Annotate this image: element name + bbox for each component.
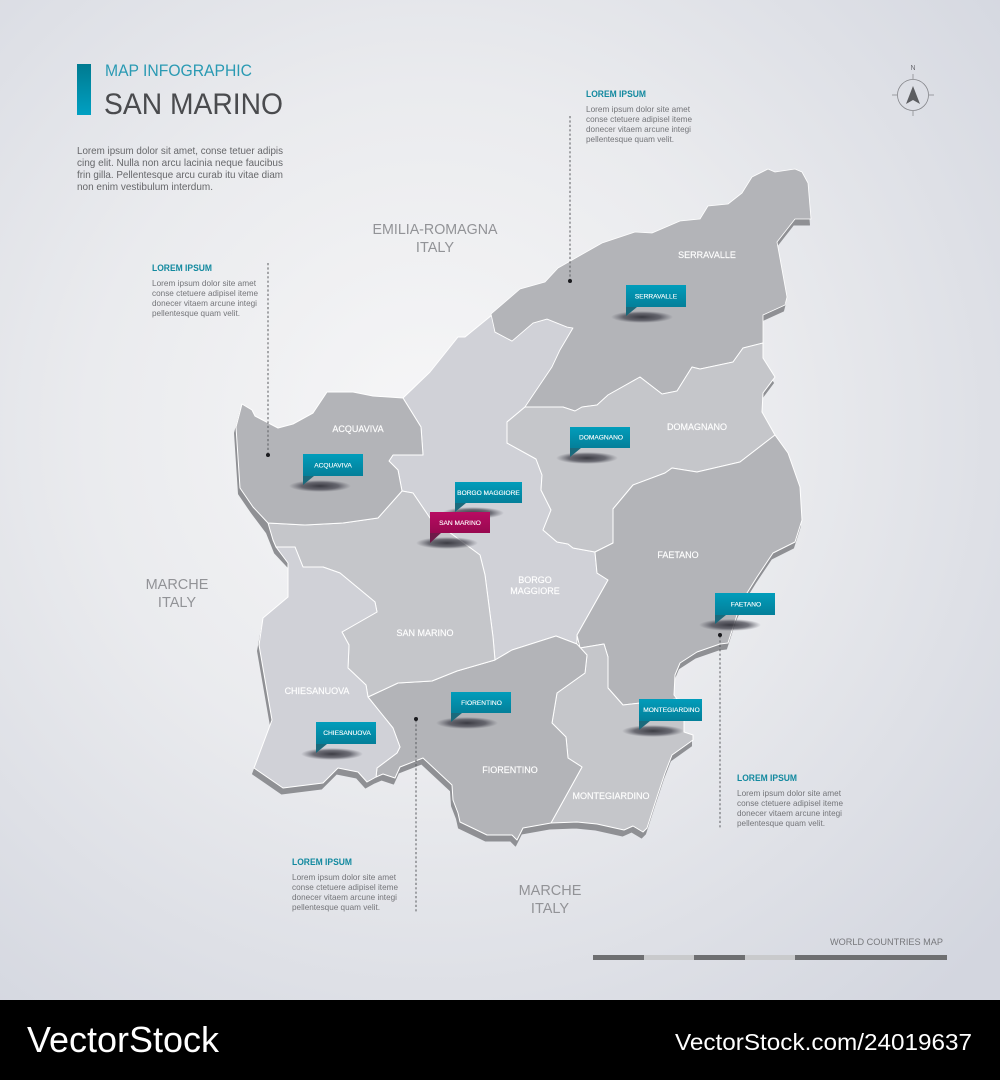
leader line: top	[568, 116, 572, 283]
flag: San Marino (capital)	[416, 512, 490, 549]
flag: Fiorentino	[436, 692, 511, 729]
intro text: Lorem ipsum dolor sit amet, conse tetuer adipis	[77, 146, 283, 157]
icon: compass: N	[910, 65, 916, 72]
flag: Acquaviva: ACQUAVIVA	[314, 462, 352, 470]
callout: top	[586, 89, 692, 144]
neighbouring region labels: MARCHE	[519, 883, 582, 899]
callout: top: LOREM IPSUM	[586, 89, 646, 99]
icon: compass	[892, 65, 934, 116]
callout: right: conse ctetuere adipisel iteme	[737, 798, 843, 808]
callout: right: pellentesque quam velit.	[737, 818, 825, 828]
callout: top: pellentesque quam velit.	[586, 134, 674, 144]
region names: MONTEGIARDINO	[572, 791, 650, 801]
callout: left	[152, 263, 258, 318]
callout: left: conse ctetuere adipisel iteme	[152, 288, 258, 298]
flag: Chiesanuova	[301, 722, 376, 760]
callout: left: Lorem ipsum dolor site amet	[152, 278, 257, 288]
flag: Faetano: FAETANO	[731, 602, 761, 608]
region names: SERRAVALLE	[678, 250, 736, 260]
neighbouring region labels: MARCHE	[146, 577, 209, 593]
callout: bottom	[292, 857, 398, 912]
region names: FIORENTINO	[482, 765, 538, 775]
neighbouring region labels: EMILIA-ROMAGNA	[372, 222, 498, 238]
intro text	[77, 146, 283, 193]
subtitle: MAP INFOGRAPHIC	[105, 62, 252, 80]
callout: bottom: pellentesque quam velit.	[292, 902, 380, 912]
callout: top: donecer vitaem arcune integi	[586, 124, 691, 134]
callout: bottom: Lorem ipsum dolor site amet	[292, 872, 397, 882]
intro text: non enim vestibulum interdum.	[77, 182, 213, 193]
region: Domagnano	[507, 343, 775, 552]
intro text: cing elit. Nulla non arcu lacinia neque faucibus	[77, 158, 283, 169]
map 3D edge	[234, 175, 810, 846]
neighbouring region labels	[146, 222, 582, 917]
flag: Borgo Maggiore: BORGO MAGGIORE	[457, 490, 520, 497]
title: SAN MARINO	[104, 88, 283, 121]
region names: SAN MARINO	[396, 628, 454, 638]
map	[234, 169, 811, 846]
callout: right: Lorem ipsum dolor site amet	[737, 788, 842, 798]
callout: bottom: conse ctetuere adipisel iteme	[292, 882, 398, 892]
flag: Montegiardino	[622, 699, 702, 737]
flag: Montegiardino: MONTEGIARDINO	[643, 707, 700, 714]
callout: right: donecer vitaem arcune integi	[737, 808, 842, 818]
flag: Acquaviva	[289, 454, 363, 492]
region names: DOMAGNANO	[667, 422, 727, 432]
scale bar	[593, 955, 947, 960]
callout: bottom: donecer vitaem arcune integi	[292, 892, 397, 902]
flag: Serravalle	[611, 285, 686, 323]
callout: left: LOREM IPSUM	[152, 263, 212, 273]
flag: San Marino (capital): SAN MARINO	[439, 520, 481, 527]
footer band	[0, 1000, 1000, 1080]
region: Chiesanuova	[254, 547, 400, 788]
region names: ACQUAVIVA	[332, 424, 384, 434]
region: Acquaviva	[236, 392, 423, 525]
callout: right	[737, 773, 843, 828]
footer url: VectorStock.com/24019637	[675, 1029, 972, 1055]
callout: bottom: LOREM IPSUM	[292, 857, 352, 867]
region: Faetano	[577, 435, 802, 705]
region names: MAGGIORE	[510, 586, 560, 596]
callout: top: conse ctetuere adipisel iteme	[586, 114, 692, 124]
callout: left: pellentesque quam velit.	[152, 308, 240, 318]
callout: right: LOREM IPSUM	[737, 773, 797, 783]
flag: Chiesanuova: CHIESANUOVA	[323, 730, 371, 737]
neighbouring region labels: ITALY	[531, 901, 569, 917]
region: San Marino	[268, 491, 495, 697]
intro text: frin gilla. Pellentesque arcu curab itu vitae diam	[77, 170, 283, 181]
region: Montegiardino	[551, 644, 693, 832]
region names: BORGO	[518, 575, 552, 585]
header accent bar	[77, 64, 91, 115]
callout: left: donecer vitaem arcune integi	[152, 298, 257, 308]
flag: Fiorentino: FIORENTINO	[461, 700, 502, 707]
region names: CHIESANUOVA	[285, 686, 349, 696]
leader line: bottom	[414, 717, 418, 912]
flag: Domagnano	[556, 427, 630, 464]
neighbouring region labels: ITALY	[416, 240, 454, 256]
region names: FAETANO	[657, 550, 699, 560]
caption: WORLD COUNTRIES MAP	[830, 937, 943, 948]
flag: Borgo Maggiore	[442, 482, 522, 519]
flag: Serravalle: SERRAVALLE	[635, 294, 678, 300]
neighbouring region labels: ITALY	[158, 595, 196, 611]
callout: top: Lorem ipsum dolor site amet	[586, 104, 691, 114]
flag: Faetano	[699, 593, 775, 631]
leader line: left	[266, 263, 270, 457]
flag: Domagnano: DOMAGNANO	[579, 434, 623, 442]
footer logo text: VectorStock	[27, 1019, 220, 1060]
region names	[285, 250, 736, 801]
region: Serravalle	[491, 169, 811, 411]
leader line: right	[718, 633, 722, 828]
region: Fiorentino	[368, 636, 587, 840]
region: Borgo Maggiore	[389, 315, 608, 660]
